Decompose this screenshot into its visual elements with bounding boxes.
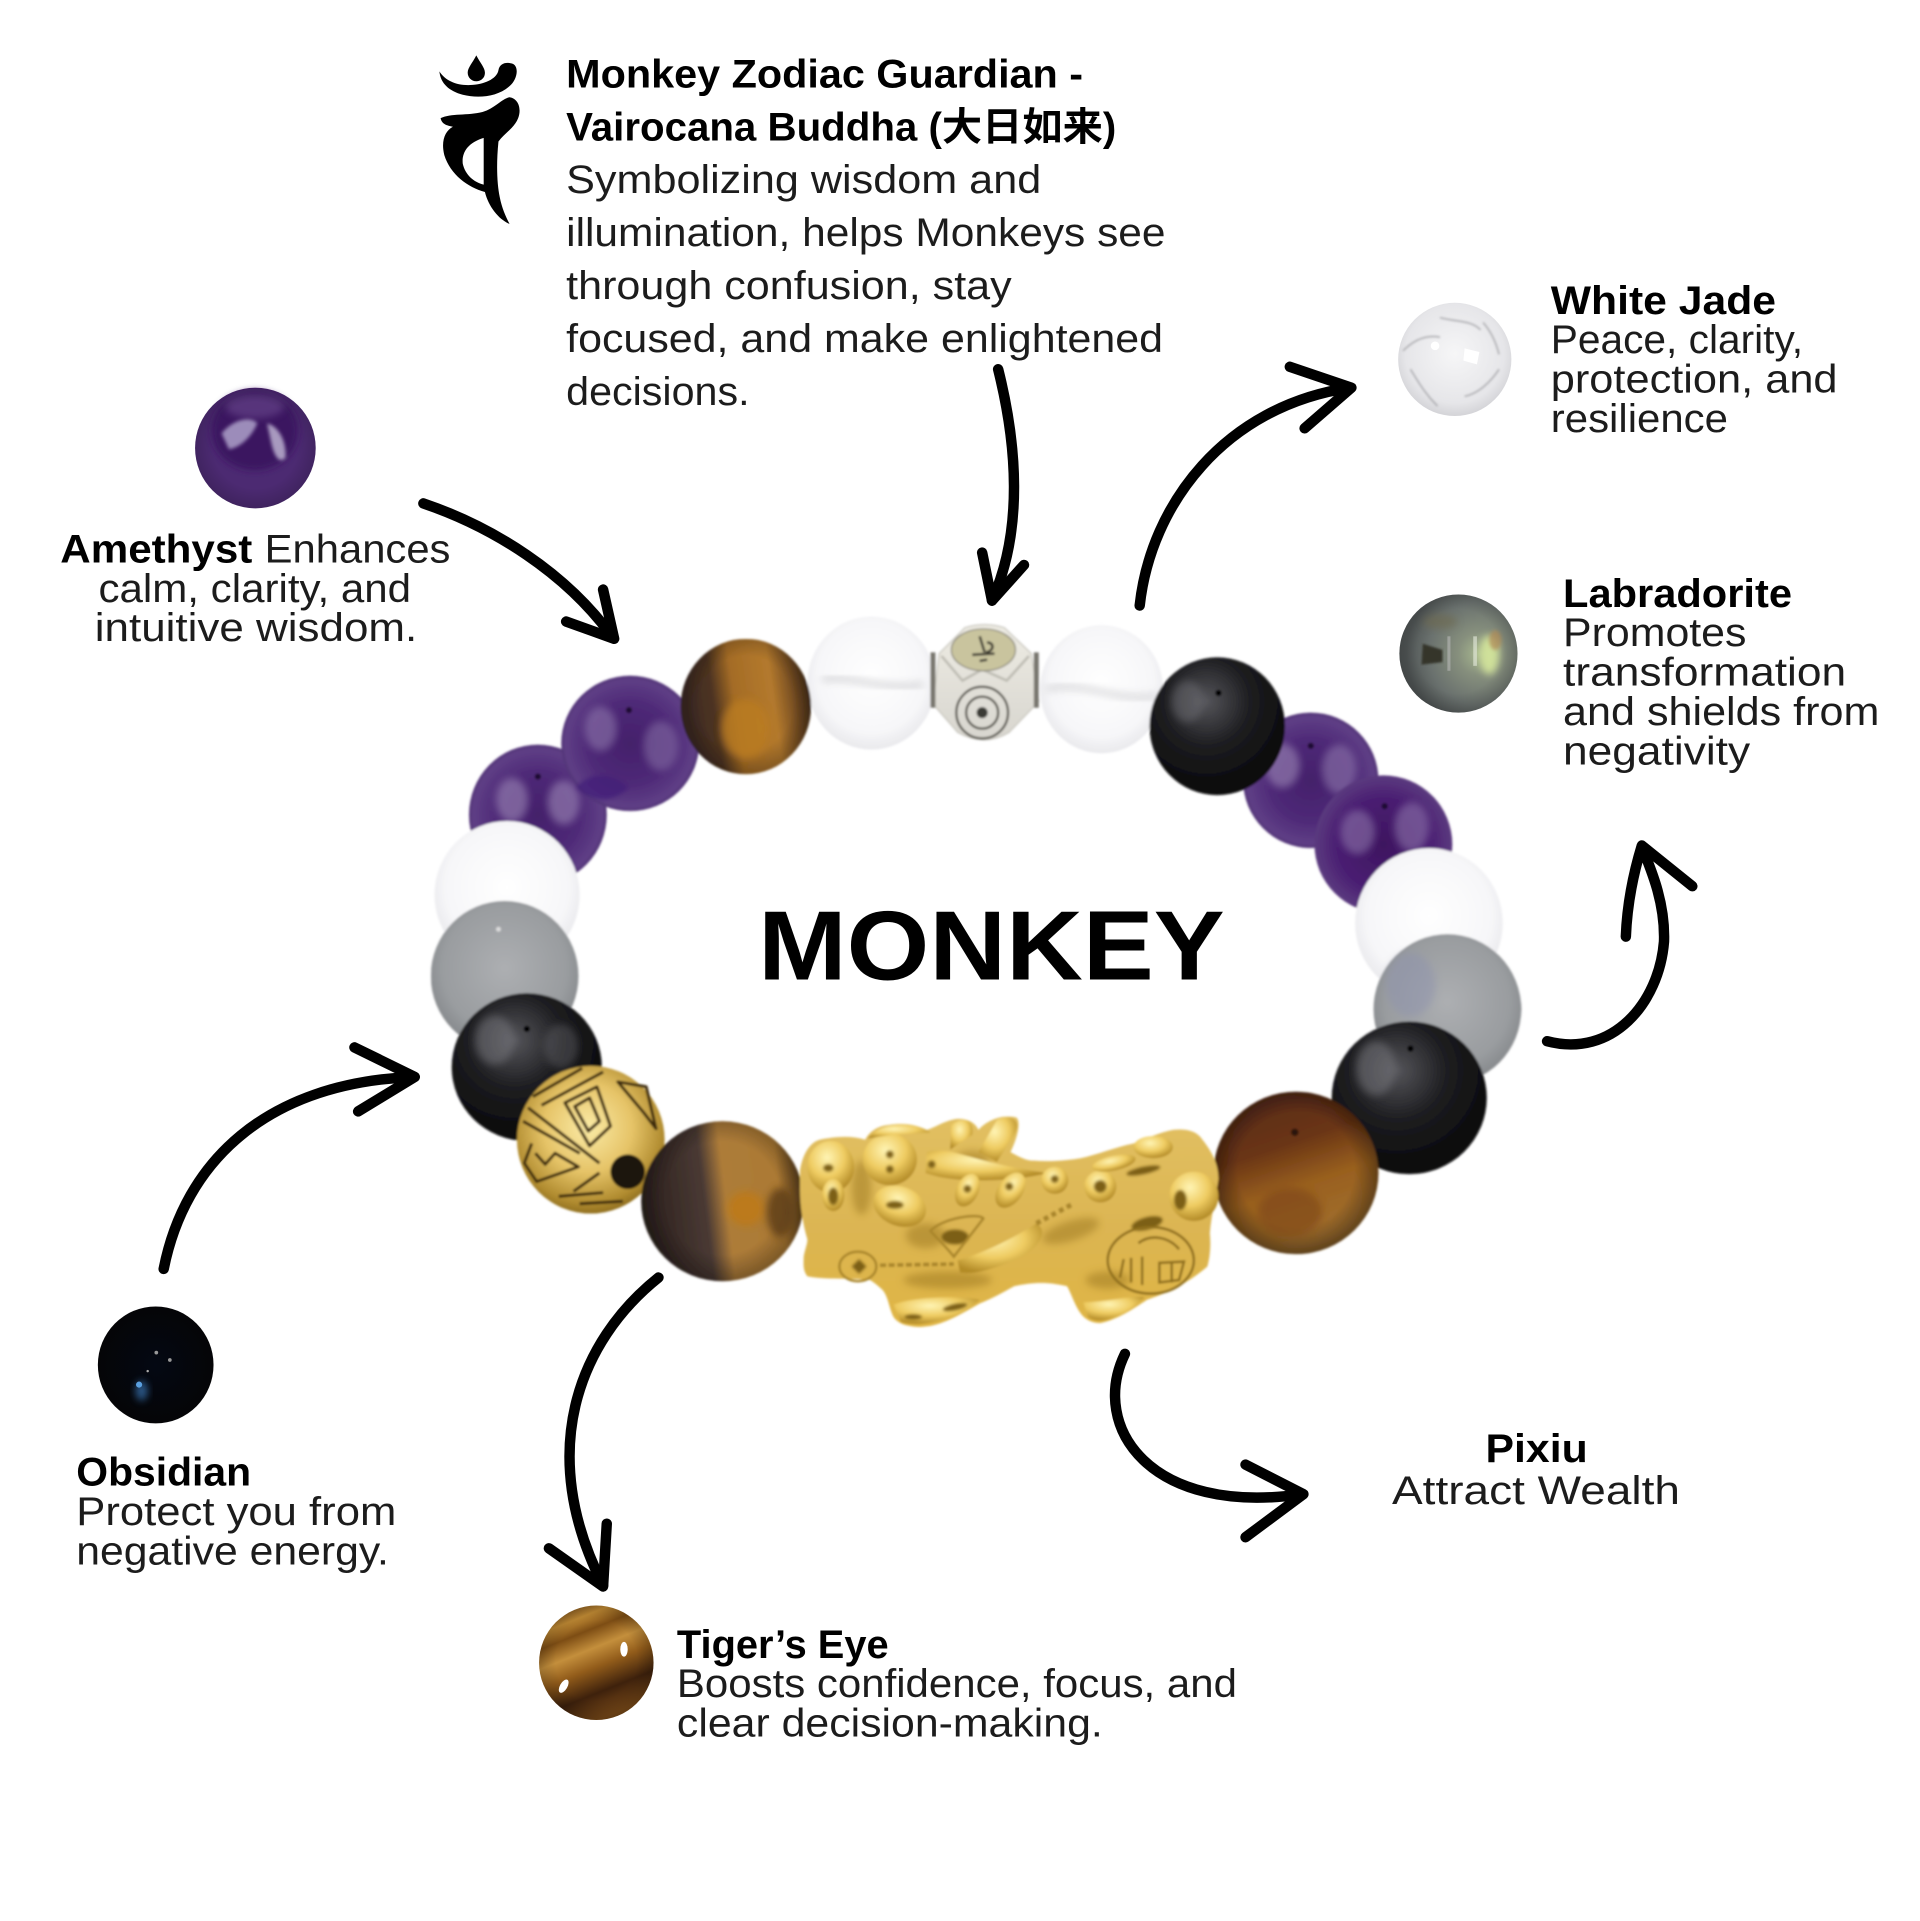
label: Tiger's Eye — [677, 1623, 1237, 1746]
label: Labradorite: transformation — [1563, 651, 1846, 695]
label: Obsidian: Protect you from — [76, 1490, 396, 1534]
title: MONKEY: MONKEY — [758, 891, 1225, 1001]
label: Tiger's Eye: Boosts confidence, focus, and — [677, 1662, 1237, 1706]
pixiu: soft body shadows — [852, 1151, 1130, 1289]
label: Labradorite: Promotes — [1563, 611, 1746, 655]
text block: guardian description: Symbolizing wisdom and — [566, 158, 1041, 202]
label: Amethyst — [60, 527, 450, 650]
label: Labradorite — [1563, 572, 1879, 773]
text block: guardian description: focused, and make enlightened — [566, 317, 1163, 361]
icon: amethyst stone — [195, 388, 316, 508]
pixiu: beaded spine and whisker — [839, 1204, 1073, 1281]
label: Labradorite: Labradorite — [1563, 572, 1792, 616]
text block: guardian description: decisions. — [566, 370, 750, 414]
label: Amethyst: Enhances — [265, 527, 450, 571]
bead: left amethyst upper — [561, 676, 699, 811]
pixiu: coin medallion — [1108, 1227, 1194, 1294]
label: White Jade: Peace, clarity, — [1551, 318, 1803, 362]
bead: right tiger's eye — [1214, 1092, 1378, 1254]
label: Obsidian: Obsidian — [76, 1451, 251, 1495]
label: Pixiu: Attract Wealth — [1392, 1469, 1680, 1513]
icon: labradorite stone — [1399, 594, 1518, 713]
heading: Monkey Zodiac Guardian: Monkey Zodiac Guardian - — [566, 52, 1083, 96]
bead: top tiger's eye — [681, 639, 811, 774]
bracelet — [431, 617, 1521, 1327]
bead: top white jade left — [807, 617, 935, 750]
label: Obsidian: negative energy. — [76, 1529, 389, 1573]
pixiu: glossy head and body lobes — [807, 1117, 1218, 1324]
bead: top white jade right — [1040, 625, 1163, 753]
heading: Monkey Zodiac Guardian — [566, 52, 1116, 149]
pixiu: golden charm — [800, 1116, 1218, 1327]
bead: lower-left tiger's eye — [641, 1121, 804, 1281]
bead: right labradorite — [1374, 934, 1521, 1084]
label: White Jade: White Jade — [1551, 279, 1776, 323]
text block: guardian description: through confusion, stay — [566, 264, 1012, 308]
label: White Jade: protection, and — [1551, 358, 1838, 402]
label: Pixiu — [1392, 1427, 1680, 1513]
label: Amethyst: calm, clarity, and — [98, 567, 411, 611]
label: Tiger's Eye: clear decision-making. — [677, 1702, 1103, 1746]
arrow: guardian to silver bead — [982, 369, 1024, 601]
bead: left obsidian — [452, 993, 602, 1141]
bead: left white jade — [434, 821, 580, 969]
arrow: bracelet to labradorite — [1547, 846, 1692, 1044]
bead: top obsidian — [1150, 657, 1285, 795]
heading: Monkey Zodiac Guardian: Vairocana Buddha (大日如来) — [566, 105, 1116, 149]
pixiu: dark accents — [823, 1151, 1186, 1319]
bead: right obsidian — [1332, 1022, 1487, 1174]
arrow: obsidian to bracelet — [164, 1047, 415, 1269]
label: Labradorite: and shields from — [1563, 690, 1879, 734]
bead: right amethyst lower — [1314, 775, 1452, 913]
text block: guardian description: illumination, helps Monkeys see — [566, 211, 1166, 255]
label: Labradorite: negativity — [1563, 729, 1750, 773]
silver bead concentric rings — [956, 687, 1008, 738]
icon: obsidian stone — [98, 1306, 214, 1423]
label: Obsidian — [76, 1451, 396, 1573]
label: Tiger's Eye: Tiger’s Eye — [677, 1623, 889, 1667]
bead: left labradorite — [431, 901, 578, 1051]
bead: right amethyst upper — [1243, 713, 1378, 848]
arrow: bracelet to tiger's eye — [549, 1278, 658, 1586]
icon: tiger's eye stone — [539, 1606, 654, 1720]
icon: white jade stone — [1398, 303, 1511, 416]
label: Pixiu: Pixiu — [1486, 1427, 1588, 1471]
label: Amethyst: intuitive wisdom. — [95, 606, 417, 650]
silver bead engraved circle — [951, 629, 1015, 671]
arrow: bracelet to white jade — [1140, 367, 1351, 606]
bead: right white jade — [1355, 848, 1503, 998]
icon: Vairocana siddham seed syllable — [439, 55, 520, 224]
bead: engraved gold bead — [517, 1066, 665, 1214]
label: White Jade: resilience — [1551, 397, 1728, 441]
text block: guardian description — [566, 158, 1166, 414]
arrow: amethyst to bracelet — [423, 503, 614, 639]
arrow: pixiu to label — [1115, 1354, 1303, 1537]
label: Amethyst: Amethyst — [60, 527, 252, 571]
bead: left amethyst lower — [469, 745, 607, 885]
label: White Jade — [1551, 279, 1838, 441]
bead: silver hexagonal guardian bead — [933, 625, 1039, 740]
